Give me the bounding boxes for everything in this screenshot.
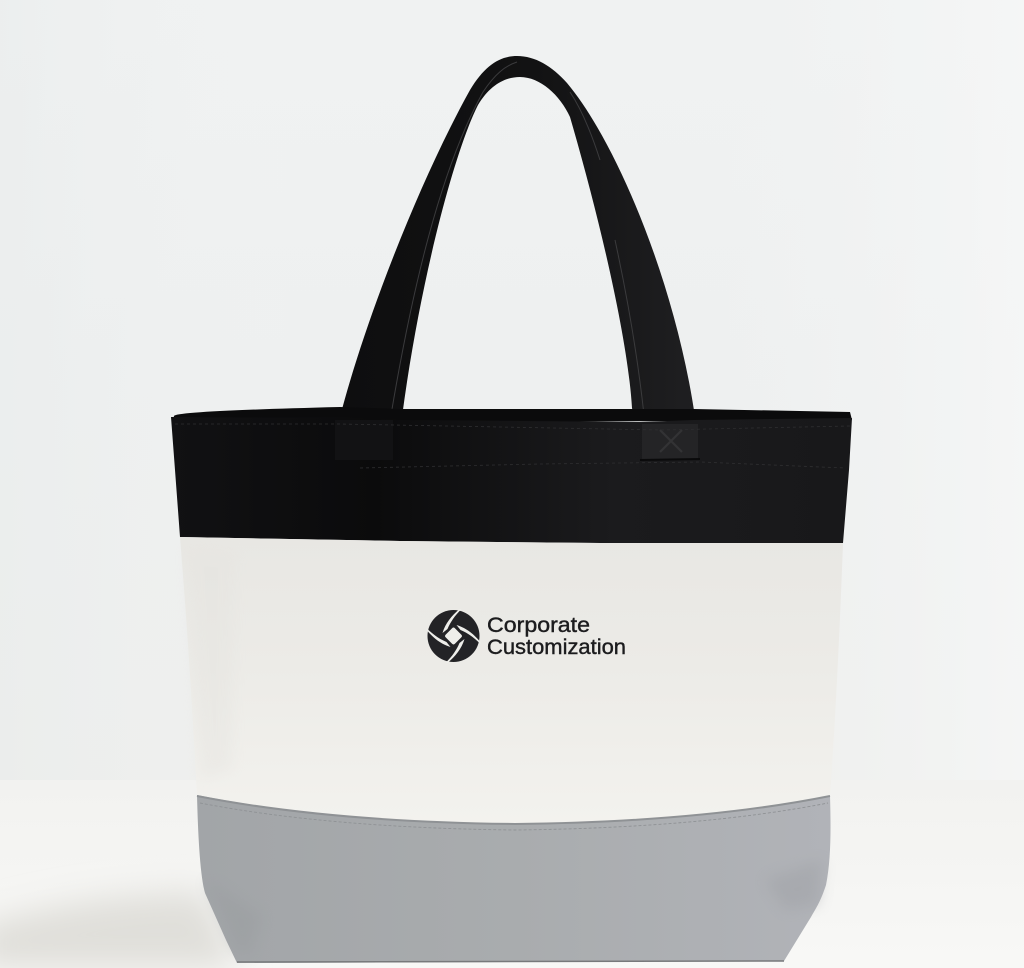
strap patch left (335, 420, 393, 460)
logo wordmark: Corporate (487, 614, 590, 637)
panel: black top band (171, 417, 852, 543)
icon: swirl emblem (426, 609, 480, 663)
handle strap (340, 56, 695, 417)
panel: white middle (180, 537, 843, 823)
stitching on band (175, 424, 850, 468)
strap patch right with cross stitch (640, 424, 700, 460)
white panel shading (186, 548, 235, 780)
bag back panel inner rim (172, 407, 852, 424)
bottom edge (237, 961, 784, 962)
bag shadow (0, 892, 240, 968)
background: table surface (0, 780, 1024, 968)
panel: grey bottom (197, 795, 831, 963)
tote bag (171, 56, 852, 963)
logo wordmark (487, 614, 626, 659)
logo wordmark: Customization (487, 636, 626, 659)
handle stitching (391, 62, 644, 415)
grey folds (206, 860, 822, 955)
grey stitching seam (197, 796, 830, 824)
logo (426, 609, 626, 663)
